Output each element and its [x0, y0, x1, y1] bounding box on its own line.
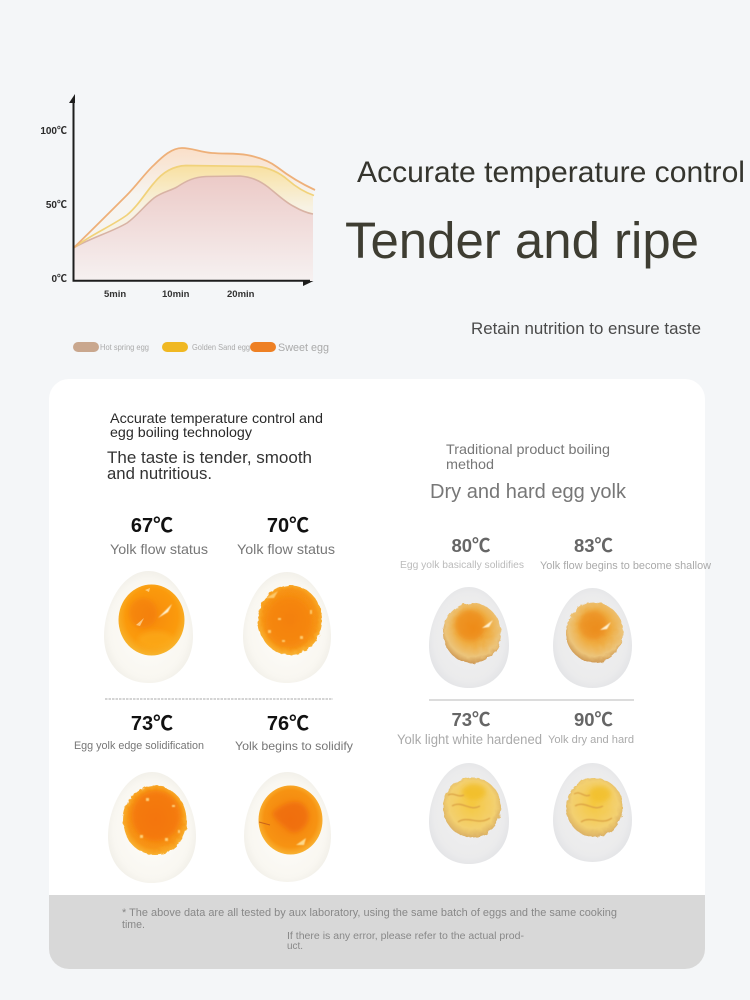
- chart legend: Sweet egg: [278, 342, 329, 354]
- egg 90C: 90℃: [574, 709, 614, 730]
- right column heading: method: [446, 456, 494, 472]
- right column heading: [430, 441, 627, 503]
- egg 73C hardened: 73℃: [451, 709, 491, 730]
- temperature line chart: 10min: [162, 289, 190, 300]
- egg 83C: 83℃: [574, 535, 614, 556]
- footer note panel: [49, 895, 705, 969]
- footer note panel: * The above data are all tested by aux laboratory, using the same batch of eggs and the same cooking: [122, 907, 617, 919]
- main heading: Tender and ripe: [345, 212, 699, 269]
- right column heading: Dry and hard egg yolk: [430, 481, 627, 503]
- egg 70C: [237, 515, 335, 683]
- egg 73C: 73℃: [131, 713, 173, 735]
- egg 73C hardened: [397, 709, 542, 864]
- divider: left dashed: [105, 698, 333, 700]
- comparison card: [49, 379, 705, 969]
- chart legend: Hot spring egg: [100, 343, 149, 352]
- temperature line chart: 50℃: [46, 200, 67, 211]
- egg 80C: 80℃: [451, 535, 491, 556]
- egg 73C hardened: Yolk light white hardened: [397, 732, 542, 747]
- temperature line chart: [40, 94, 315, 300]
- chart legend: [73, 342, 329, 354]
- divider: right solid: [429, 699, 634, 701]
- footer note panel: uct.: [287, 941, 303, 952]
- left column heading: and nutritious.: [107, 464, 212, 483]
- egg 73C: [74, 713, 204, 883]
- footer note panel: time.: [122, 919, 145, 931]
- egg 76C: [235, 713, 353, 882]
- left column heading: Accurate temperature control and: [110, 410, 323, 426]
- egg 67C: [104, 515, 208, 683]
- left column heading: [107, 410, 323, 483]
- egg 83C: Yolk flow begins to become shallow: [540, 560, 711, 572]
- chart legend: Golden Sand egg: [192, 343, 250, 352]
- egg 90C: [548, 709, 634, 862]
- egg 83C: [540, 535, 711, 688]
- temperature line chart: 5min: [104, 289, 126, 300]
- right column heading: Traditional product boiling: [446, 441, 610, 457]
- footer note panel: If there is any error, please refer to the actual prod-: [287, 931, 524, 942]
- temperature line chart: 100℃: [40, 126, 67, 137]
- egg 80C: Egg yolk basically solidifies: [400, 560, 524, 571]
- egg 70C: 70℃: [267, 515, 309, 537]
- egg 76C: 76℃: [267, 713, 309, 735]
- subtitle: Accurate temperature control: [357, 156, 745, 189]
- temperature line chart: 0℃: [51, 274, 67, 285]
- tagline: Retain nutrition to ensure taste: [471, 319, 701, 338]
- egg 70C: Yolk flow status: [237, 541, 335, 557]
- egg 76C: Yolk begins to solidify: [235, 739, 353, 753]
- left column heading: The taste is tender, smooth: [107, 448, 312, 467]
- egg 67C: 67℃: [131, 515, 173, 537]
- egg 80C: [400, 535, 524, 688]
- left column heading: egg boiling technology: [110, 424, 252, 440]
- egg 73C: Egg yolk edge solidification: [74, 740, 204, 752]
- temperature line chart: 20min: [227, 289, 255, 300]
- egg 90C: Yolk dry and hard: [548, 734, 634, 746]
- egg 67C: Yolk flow status: [110, 541, 208, 557]
